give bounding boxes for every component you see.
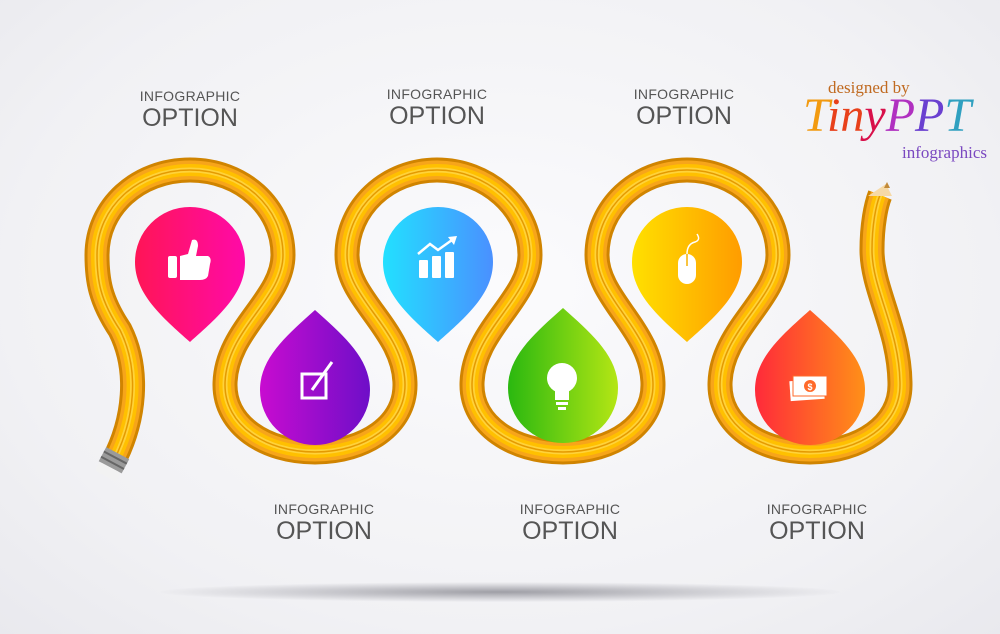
drop 1 pink thumbs up bbox=[135, 207, 245, 342]
label: top 3 bbox=[634, 86, 734, 130]
label: top 3: OPTION bbox=[636, 102, 732, 130]
drop 3 blue chart bbox=[383, 207, 493, 342]
pencil snake bbox=[97, 170, 900, 462]
logo: designed by bbox=[828, 78, 910, 97]
icon: chart bbox=[418, 236, 457, 278]
label: top 3: INFOGRAPHIC bbox=[634, 86, 734, 102]
icon: money: $ bbox=[807, 382, 813, 392]
logo bbox=[803, 78, 987, 162]
label: top 1: OPTION bbox=[142, 104, 238, 132]
label: bottom 1: INFOGRAPHIC bbox=[274, 501, 374, 517]
label: bottom 2 bbox=[520, 501, 620, 545]
icon: thumbs up bbox=[168, 240, 211, 280]
label: bottom 1: OPTION bbox=[276, 517, 372, 545]
icon: light bulb bbox=[547, 363, 577, 410]
icon: edit bbox=[302, 362, 332, 398]
label: top 1 bbox=[140, 88, 240, 132]
drop 5 yellow mouse bbox=[632, 207, 742, 342]
label: bottom 1 bbox=[274, 501, 374, 545]
drop 2 purple edit bbox=[260, 310, 370, 445]
label: top 2: INFOGRAPHIC bbox=[387, 86, 487, 102]
label: bottom 3: INFOGRAPHIC bbox=[767, 501, 867, 517]
label: top 2 bbox=[387, 86, 487, 130]
drop 6 red money bbox=[755, 310, 865, 445]
icon: mouse bbox=[678, 234, 699, 284]
shadow under graphic bbox=[160, 582, 840, 602]
pencil tip bbox=[868, 182, 892, 196]
logo: TinyPPT bbox=[803, 89, 971, 142]
label: top 1: INFOGRAPHIC bbox=[140, 88, 240, 104]
drop 4 green bulb bbox=[508, 308, 618, 443]
pencil eraser end bbox=[94, 447, 129, 482]
label: bottom 2: OPTION bbox=[522, 517, 618, 545]
label: bottom 3 bbox=[767, 501, 867, 545]
label: bottom 2: INFOGRAPHIC bbox=[520, 501, 620, 517]
label: bottom 3: OPTION bbox=[769, 517, 865, 545]
logo: infographics bbox=[902, 143, 987, 162]
label: top 2: OPTION bbox=[389, 102, 485, 130]
icon: money bbox=[789, 376, 827, 401]
